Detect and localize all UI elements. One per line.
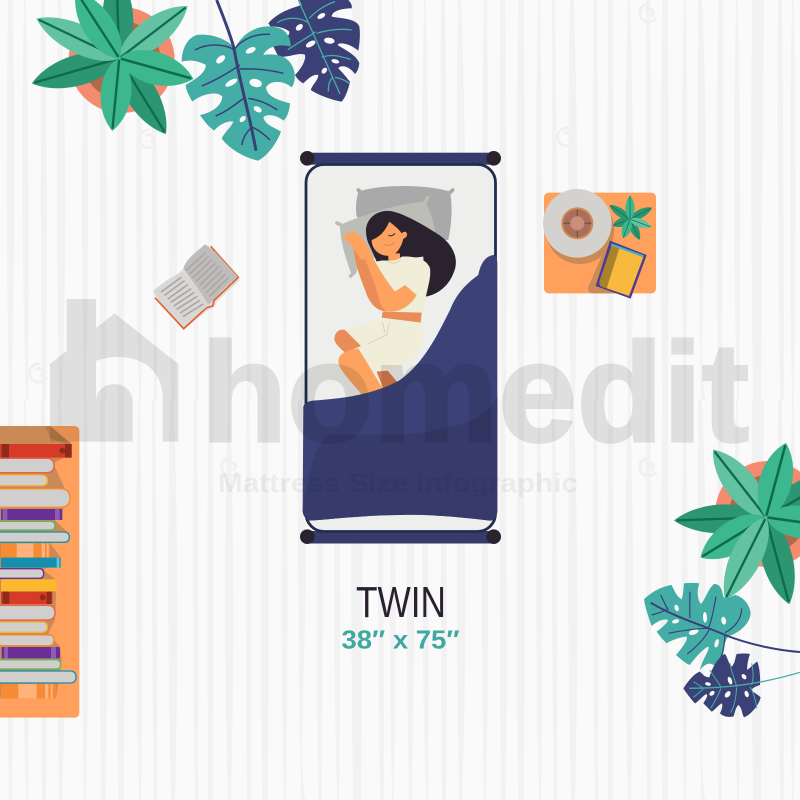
lower leg shadow	[377, 371, 398, 393]
book shadows	[0, 426, 72, 698]
bed posts	[300, 151, 501, 544]
left page	[153, 272, 208, 327]
far arm	[353, 245, 387, 312]
shorts	[345, 318, 423, 372]
near arm	[358, 243, 417, 312]
monstera leaves: bottom right	[644, 583, 800, 717]
table top	[544, 193, 656, 293]
blue book	[1, 558, 61, 568]
face	[372, 222, 407, 256]
green-edged book	[0, 521, 55, 530]
navy monstera leaf	[268, 0, 360, 102]
hair	[366, 211, 456, 297]
side table with lamp, plant and book	[543, 189, 656, 299]
waistband	[382, 312, 422, 323]
right page	[183, 244, 238, 305]
headboard bar	[307, 153, 493, 165]
red-edged book	[0, 605, 55, 620]
navy monstera leaf	[683, 653, 800, 717]
front leg	[338, 348, 387, 397]
monstera leaves: top	[182, 0, 360, 161]
book shadow	[157, 248, 240, 330]
front pillow	[337, 198, 437, 276]
lamp shadow	[546, 195, 614, 264]
sleeping woman and blanket	[303, 186, 497, 521]
watermark: homedit logo	[50, 299, 749, 471]
second red book	[1, 592, 52, 604]
mattress	[306, 164, 496, 532]
shirt	[368, 257, 430, 313]
plant: top-left potted plant	[28, 0, 198, 142]
hand and fingers	[345, 232, 372, 260]
house mark	[50, 299, 178, 442]
green-edged book 2	[0, 660, 61, 669]
blue-edged book 2	[0, 671, 76, 683]
neck	[388, 253, 400, 263]
orange book 2	[1, 684, 56, 698]
purple book	[1, 509, 62, 520]
open book	[153, 244, 240, 330]
yellow-edged book	[0, 475, 47, 486]
orange-edged book 2	[0, 635, 54, 646]
wordmark: homedit	[201, 313, 749, 471]
plant: right potted plant	[674, 439, 800, 608]
white-paged book	[0, 458, 54, 473]
orange panel	[0, 426, 79, 718]
teal monstera leaf	[644, 583, 800, 670]
purple-edged book	[0, 569, 44, 578]
orange-edged book	[0, 489, 70, 507]
watermark subtitle: Mattress Size Infographic	[218, 468, 578, 498]
small plant	[607, 195, 654, 242]
printed lines	[162, 253, 228, 316]
blanket fold	[303, 397, 497, 521]
orange book	[1, 543, 50, 557]
book cover edge	[155, 246, 238, 329]
book	[588, 241, 647, 299]
back leg	[334, 330, 361, 352]
stack of books	[0, 426, 79, 718]
purple book 2	[2, 647, 60, 658]
blue-edged book	[0, 532, 69, 542]
red book	[0, 444, 72, 458]
yellow book	[1, 579, 57, 591]
heading: mattress name: TWIN	[356, 579, 446, 627]
yellow-edged book 2	[0, 622, 47, 632]
dimensions: 38″ x 75″	[342, 626, 460, 654]
back pillow	[356, 186, 453, 240]
footboard bar	[307, 531, 493, 544]
blanket	[303, 255, 497, 521]
lamp	[543, 189, 612, 258]
bed	[300, 151, 501, 544]
teal monstera leaf	[182, 0, 295, 161]
